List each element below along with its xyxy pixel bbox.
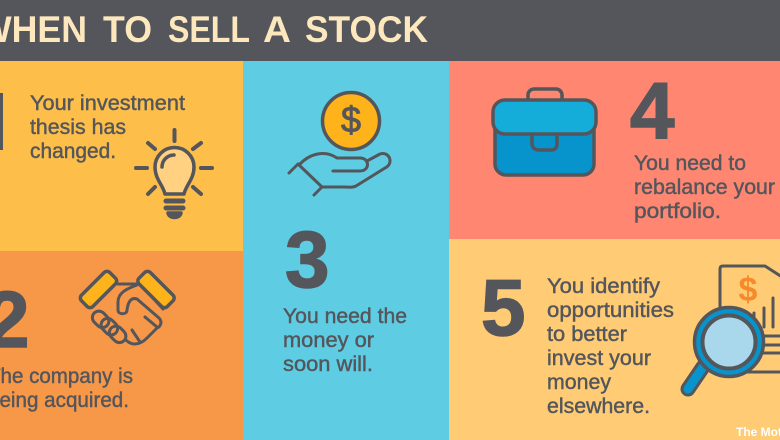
icon: light bulb — [136, 130, 212, 218]
number 1 — [0, 78, 3, 167]
title: A — [263, 9, 291, 50]
number 3: 3 — [285, 215, 330, 304]
icon: coin over hand — [289, 92, 390, 195]
text: reason 4: You need to — [634, 151, 746, 175]
text: reason 5: You identify — [547, 274, 660, 298]
text: reason 1 — [30, 91, 185, 163]
text: reason 5: money — [547, 370, 611, 394]
title: TO — [103, 9, 152, 50]
number 5: 5 — [481, 263, 526, 352]
icon: coin over hand: $ — [341, 99, 361, 140]
text: reason 1: changed. — [30, 139, 116, 163]
title: STOCK — [305, 9, 428, 50]
text: reason 3: soon will. — [283, 352, 373, 376]
panel 2: company acquired — [0, 251, 243, 440]
text: reason 3: money or — [283, 328, 374, 352]
icon: document and magnifier — [688, 266, 780, 389]
text: reason 2 — [0, 364, 133, 412]
text: reason 5: invest your — [547, 346, 651, 370]
title: SELL — [168, 9, 250, 50]
panel 5: better opportunities — [449, 239, 780, 440]
text: reason 1: Your investment — [30, 91, 185, 115]
panel 1: thesis changed — [0, 61, 243, 251]
text: reason 5: to better — [547, 322, 627, 346]
text: reason 3: You need the — [283, 304, 407, 328]
panel 3: need the money — [243, 61, 449, 440]
text: reason 5: elsewhere. — [547, 394, 650, 418]
icon: briefcase — [493, 89, 596, 175]
number 4: 4 — [630, 66, 675, 155]
panel 4: rebalance portfolio — [449, 61, 780, 239]
text: reason 4 — [634, 151, 775, 223]
header band — [0, 0, 780, 61]
icon: document and magnifier: $ — [739, 271, 758, 309]
title — [0, 9, 428, 50]
text: reason 3 — [283, 304, 407, 376]
text: reason 5 — [547, 274, 674, 418]
text: reason 4: portfolio. — [634, 199, 721, 223]
icon: handshake — [79, 270, 176, 345]
text: reason 4: rebalance your — [634, 175, 775, 199]
text: reason 1: thesis has — [30, 115, 126, 139]
text: reason 5: opportunities — [547, 298, 674, 322]
